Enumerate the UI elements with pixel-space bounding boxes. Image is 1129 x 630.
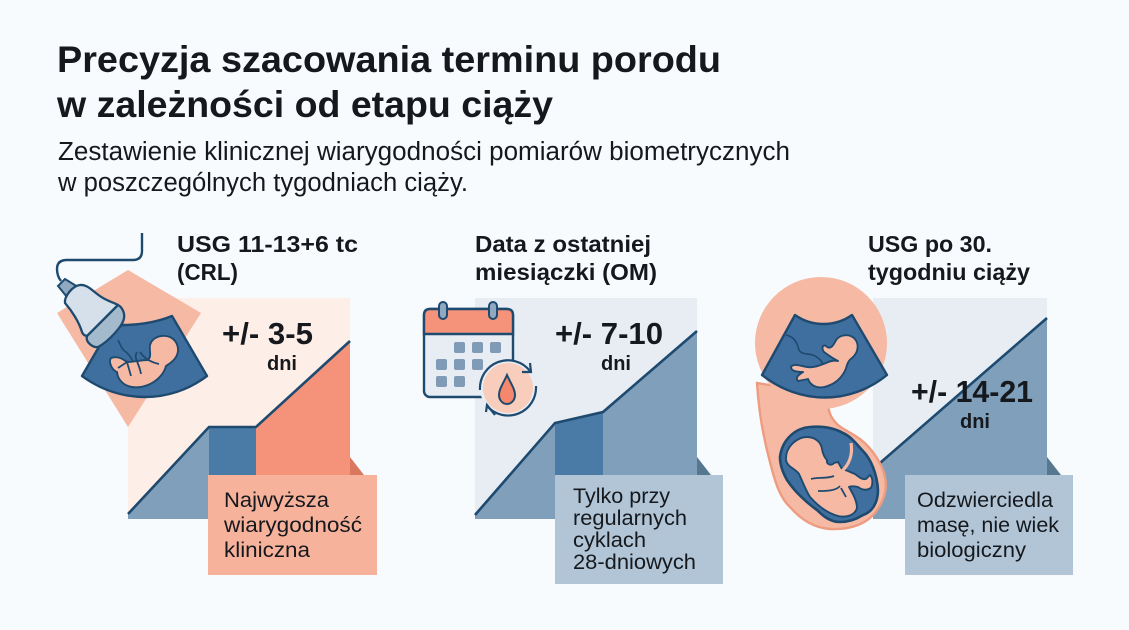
callout <box>555 475 723 584</box>
title <box>56 39 721 125</box>
panel: USG po 30. tygodniu <box>755 231 1073 575</box>
value <box>911 374 1033 433</box>
callout: wiarygodność <box>223 513 362 537</box>
heading <box>868 231 1030 285</box>
value: +/- 3-5 <box>222 316 313 351</box>
panel background <box>873 298 1047 519</box>
callout: 28-dniowych <box>573 550 696 574</box>
heading: USG 11-13+6 tc <box>177 231 358 257</box>
panel: USG 11-13+6 tc <box>57 231 377 575</box>
chart: precision area <box>475 331 711 519</box>
value: dni <box>267 353 297 375</box>
heading <box>177 231 358 285</box>
callout: regularnych <box>573 506 687 530</box>
heading: Data z ostatniej <box>475 231 651 257</box>
callout: Odzwierciedla <box>917 488 1053 512</box>
value <box>555 316 663 375</box>
value: dni <box>601 353 631 375</box>
callout: cyklach <box>573 528 646 552</box>
callout <box>208 475 377 575</box>
callout: Najwyższa <box>224 488 329 512</box>
heading <box>475 231 657 285</box>
value: dni <box>960 411 990 433</box>
value <box>222 316 313 375</box>
callout: Tylko przy <box>573 484 670 508</box>
chart: precision area <box>873 318 1061 519</box>
callout <box>905 475 1073 575</box>
subtitle: Zestawienie klinicznej wiarygodności pomiarów biometrycznych <box>58 138 790 166</box>
panel: Data z ostatniej miesiączki <box>424 231 723 584</box>
title: Precyzja szacowania terminu porodu <box>57 39 721 80</box>
icon: ultrasound and fetus in womb <box>755 277 887 529</box>
icon: calendar with cycle <box>424 302 536 416</box>
heading: USG po 30. <box>868 231 992 257</box>
callout: kliniczna <box>224 538 310 562</box>
value: +/- 14-21 <box>911 374 1033 409</box>
heading: (CRL) <box>177 259 238 285</box>
chart: precision area <box>128 341 364 519</box>
heading: tygodniu ciąży <box>868 259 1030 285</box>
heading: miesiączki (OM) <box>475 259 657 285</box>
callout: biologiczny <box>917 538 1026 562</box>
title: w zależności od etapu ciąży <box>56 84 553 125</box>
icon: ultrasound probe and fetus <box>57 233 207 427</box>
subtitle: w poszczególnych tygodniach ciąży. <box>57 169 468 197</box>
callout: masę, nie wiek <box>917 513 1059 537</box>
subtitle <box>57 138 790 197</box>
panel background <box>128 298 350 519</box>
panel background <box>475 298 697 519</box>
value: +/- 7-10 <box>555 316 663 351</box>
